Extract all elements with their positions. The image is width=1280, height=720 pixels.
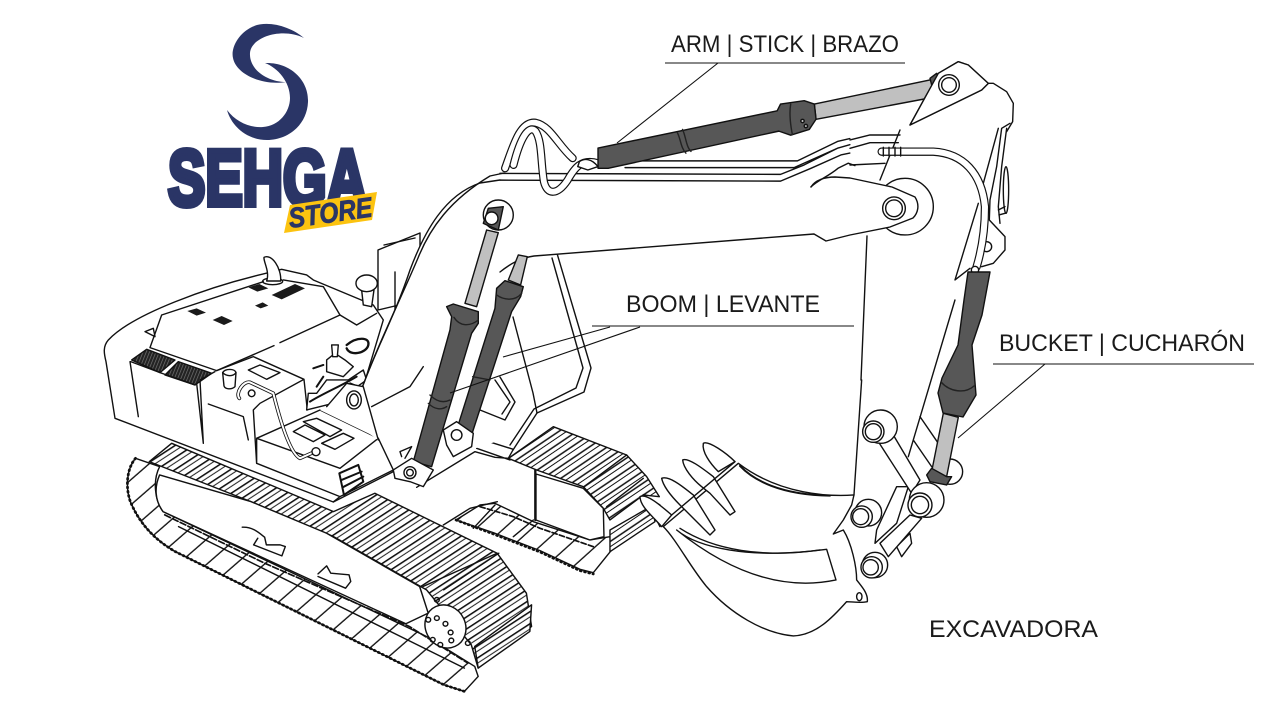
boom: [330, 173, 918, 440]
excavator drawing: [104, 62, 1013, 691]
filler cap: [223, 369, 236, 389]
step box: [257, 410, 393, 497]
rear cab box: [378, 233, 420, 310]
bucket cylinder body: [938, 272, 990, 417]
arm top pin: [930, 73, 940, 85]
boom cylinders: [393, 200, 527, 487]
cab: [378, 233, 591, 450]
linkage bars: [875, 487, 908, 543]
body panels: [130, 357, 307, 463]
arm side leaf: [955, 123, 1010, 280]
callout: arm: ARM | STICK | BRAZO: [671, 31, 899, 58]
bucket teeth: [640, 443, 735, 535]
bucket shell: [663, 463, 867, 636]
near crawler track: [127, 443, 532, 691]
linkage pins: [851, 410, 944, 578]
callout: boom: BOOM | LEVANTE: [626, 291, 820, 318]
bucket and linkage: [640, 300, 963, 636]
step ladder: [339, 465, 363, 495]
brand logo: [168, 24, 377, 234]
upper house and engine: [104, 257, 393, 502]
arm body: [867, 62, 1013, 290]
radiator grilles: [132, 349, 175, 373]
hood vents: [187, 284, 305, 325]
hydraulic tube: [238, 382, 315, 458]
callout: boom: [450, 291, 854, 393]
undercarriage centre frame: [417, 437, 513, 525]
front boom cylinder: [400, 200, 513, 467]
bucket rib: [677, 530, 836, 583]
logo store badge: STORE: [287, 191, 375, 234]
air pre-cleaner: [356, 275, 377, 307]
boom foot bracket: [320, 367, 423, 440]
callout: bucket: BUCKET | CUCHARÓN: [999, 330, 1245, 357]
boom tip pin: [883, 197, 905, 220]
caption: EXCAVADORA: [929, 616, 1098, 643]
pump and valves: [307, 339, 368, 410]
bucket cylinder rod: [932, 413, 958, 477]
boom foot pin: [393, 458, 433, 487]
hose loop: [505, 123, 598, 192]
boom pin washer: [877, 178, 933, 235]
rear boom cylinder: [443, 255, 527, 457]
drive sprocket: [418, 597, 473, 655]
far crawler track: [456, 427, 660, 574]
engine hood: [150, 280, 340, 371]
exhaust pipe: [263, 257, 283, 285]
track guard brackets: [242, 527, 285, 556]
bucket cylinder lower eye: [937, 459, 963, 484]
arm hoses, pins and top cap: [850, 62, 988, 274]
logo wordmark: SEHGA: [168, 133, 367, 222]
boom top hoses: [500, 79, 936, 192]
arm cylinder: [578, 79, 936, 170]
logo S mark: [227, 24, 308, 140]
callout: bucket: [958, 330, 1254, 438]
house shell: [104, 269, 393, 502]
arm lower edges: [854, 300, 955, 495]
cab window hexagon: [480, 377, 515, 420]
callout: arm: [617, 31, 905, 143]
